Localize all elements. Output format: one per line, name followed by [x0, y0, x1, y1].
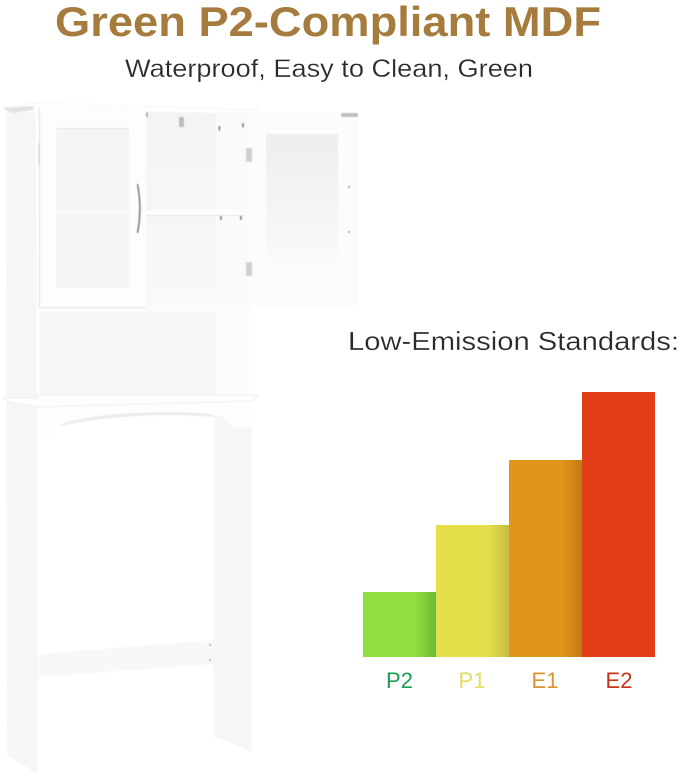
left leg and side panel	[6, 112, 38, 774]
bar: E1	[509, 460, 582, 657]
door left edge shadow	[38, 143, 40, 165]
crossbar	[39, 640, 214, 677]
subtitle: Waterproof, Easy to Clean, Green	[125, 55, 533, 83]
wall bracket	[179, 117, 184, 127]
label: P2: P2	[386, 668, 413, 693]
top cornice	[3, 103, 258, 114]
chart heading: Low-Emission Standards:	[348, 326, 679, 356]
hinges	[246, 148, 252, 162]
open lower shelf cavity	[39, 312, 248, 396]
right leg	[214, 410, 252, 752]
screw near door	[145, 112, 148, 117]
door handle	[138, 184, 140, 233]
label: P1: P1	[459, 668, 485, 693]
shelf pins	[218, 123, 244, 220]
base ledge	[2, 395, 258, 407]
bar: P2	[363, 592, 436, 657]
door tab	[341, 113, 358, 117]
arch underside shadow	[60, 412, 214, 426]
inner shelf	[146, 210, 245, 215]
right door mirror	[266, 134, 338, 286]
arched apron	[36, 402, 252, 434]
left door	[38, 108, 146, 308]
cabinet interior	[145, 110, 248, 307]
middle shelf board	[36, 306, 251, 312]
label: E2: E2	[606, 668, 632, 693]
label: E1: E1	[532, 668, 558, 693]
bar chart: emission standards	[363, 392, 655, 693]
right door, open	[246, 113, 358, 306]
bar: P1	[436, 525, 509, 657]
product: white over-toilet storage cabinet	[2, 103, 358, 774]
bar: E2	[582, 392, 655, 657]
door pegs	[348, 186, 350, 188]
left door glass	[56, 128, 129, 288]
